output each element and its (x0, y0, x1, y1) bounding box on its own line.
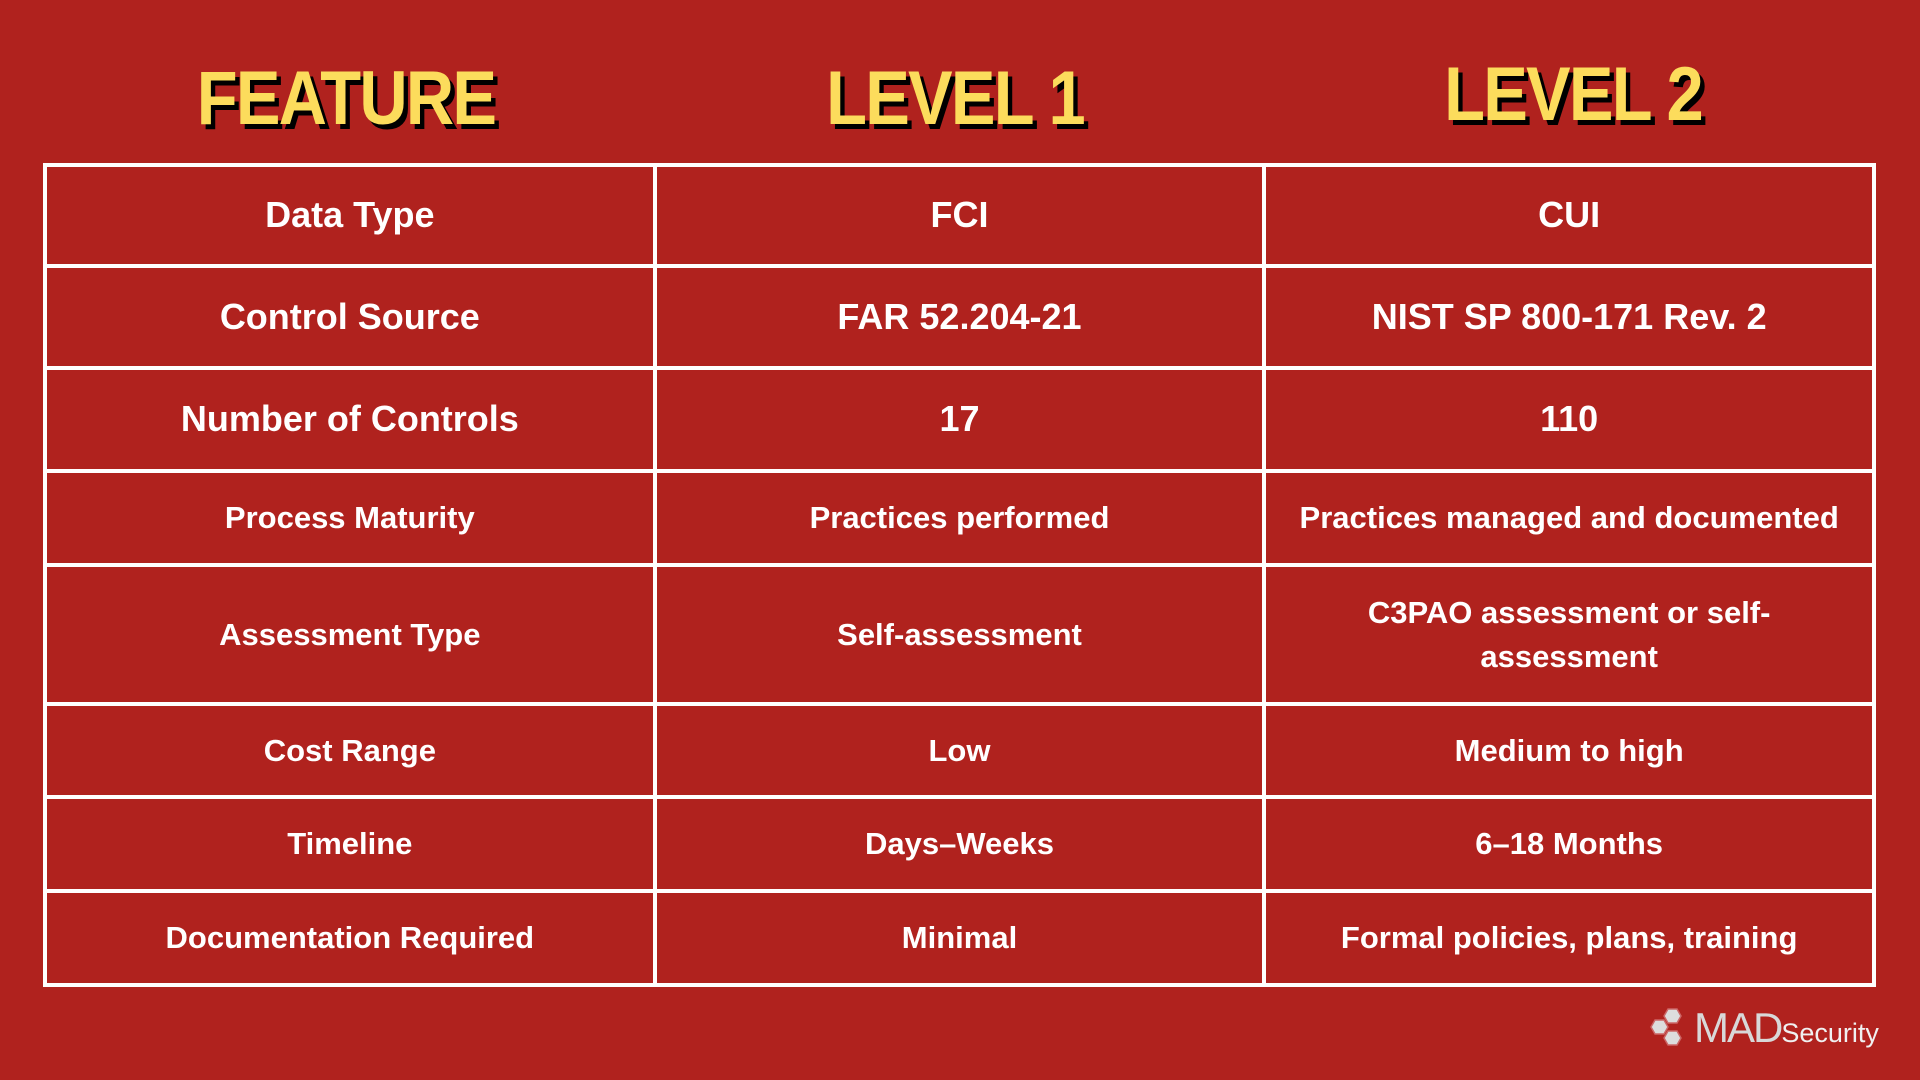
comparison table: Low (928, 733, 990, 768)
comparison table: Minimal (902, 920, 1017, 955)
comparison table: Days–Weeks (865, 826, 1054, 861)
comparison table: C3PAO assessment or self- (1368, 595, 1770, 630)
comparison table: Medium to high (1455, 733, 1684, 768)
comparison table: 110 (1540, 398, 1598, 439)
comparison table: Data Type (265, 194, 435, 235)
comparison table: assessment (1480, 638, 1658, 674)
heading: feature: FEATURE (197, 56, 495, 141)
comparison table: Formal policies, plans, training (1341, 920, 1797, 955)
comparison table: Practices performed (810, 500, 1109, 535)
comparison table: NIST SP 800-171 Rev. 2 (1372, 296, 1767, 337)
comparison table: CUI (1538, 194, 1600, 235)
comparison table: 6–18 Months (1475, 826, 1663, 861)
comparison table (43, 163, 1876, 987)
comparison table: Documentation Required (166, 920, 534, 955)
icon: hexagons (1650, 1008, 1682, 1046)
comparison table: Timeline (287, 826, 412, 861)
heading: level 2: LEVEL 2 (1444, 52, 1702, 137)
comparison table: FCI (930, 194, 988, 235)
comparison table: Cost Range (264, 733, 436, 768)
comparison table: Self-assessment (837, 617, 1082, 652)
comparison table: Practices managed and documented (1300, 500, 1839, 535)
comparison table: 17 (939, 398, 980, 439)
comparison table: Process Maturity (225, 500, 475, 535)
logo text: MADSecurity (1694, 1004, 1879, 1051)
heading: level 1: LEVEL 1 (826, 56, 1084, 141)
logo: MAD Security (1650, 1004, 1879, 1051)
comparison table: FAR 52.204-21 (837, 296, 1082, 337)
comparison table: Control Source (220, 296, 480, 337)
comparison table: Assessment Type (219, 617, 480, 652)
comparison table: Number of Controls (181, 398, 519, 439)
